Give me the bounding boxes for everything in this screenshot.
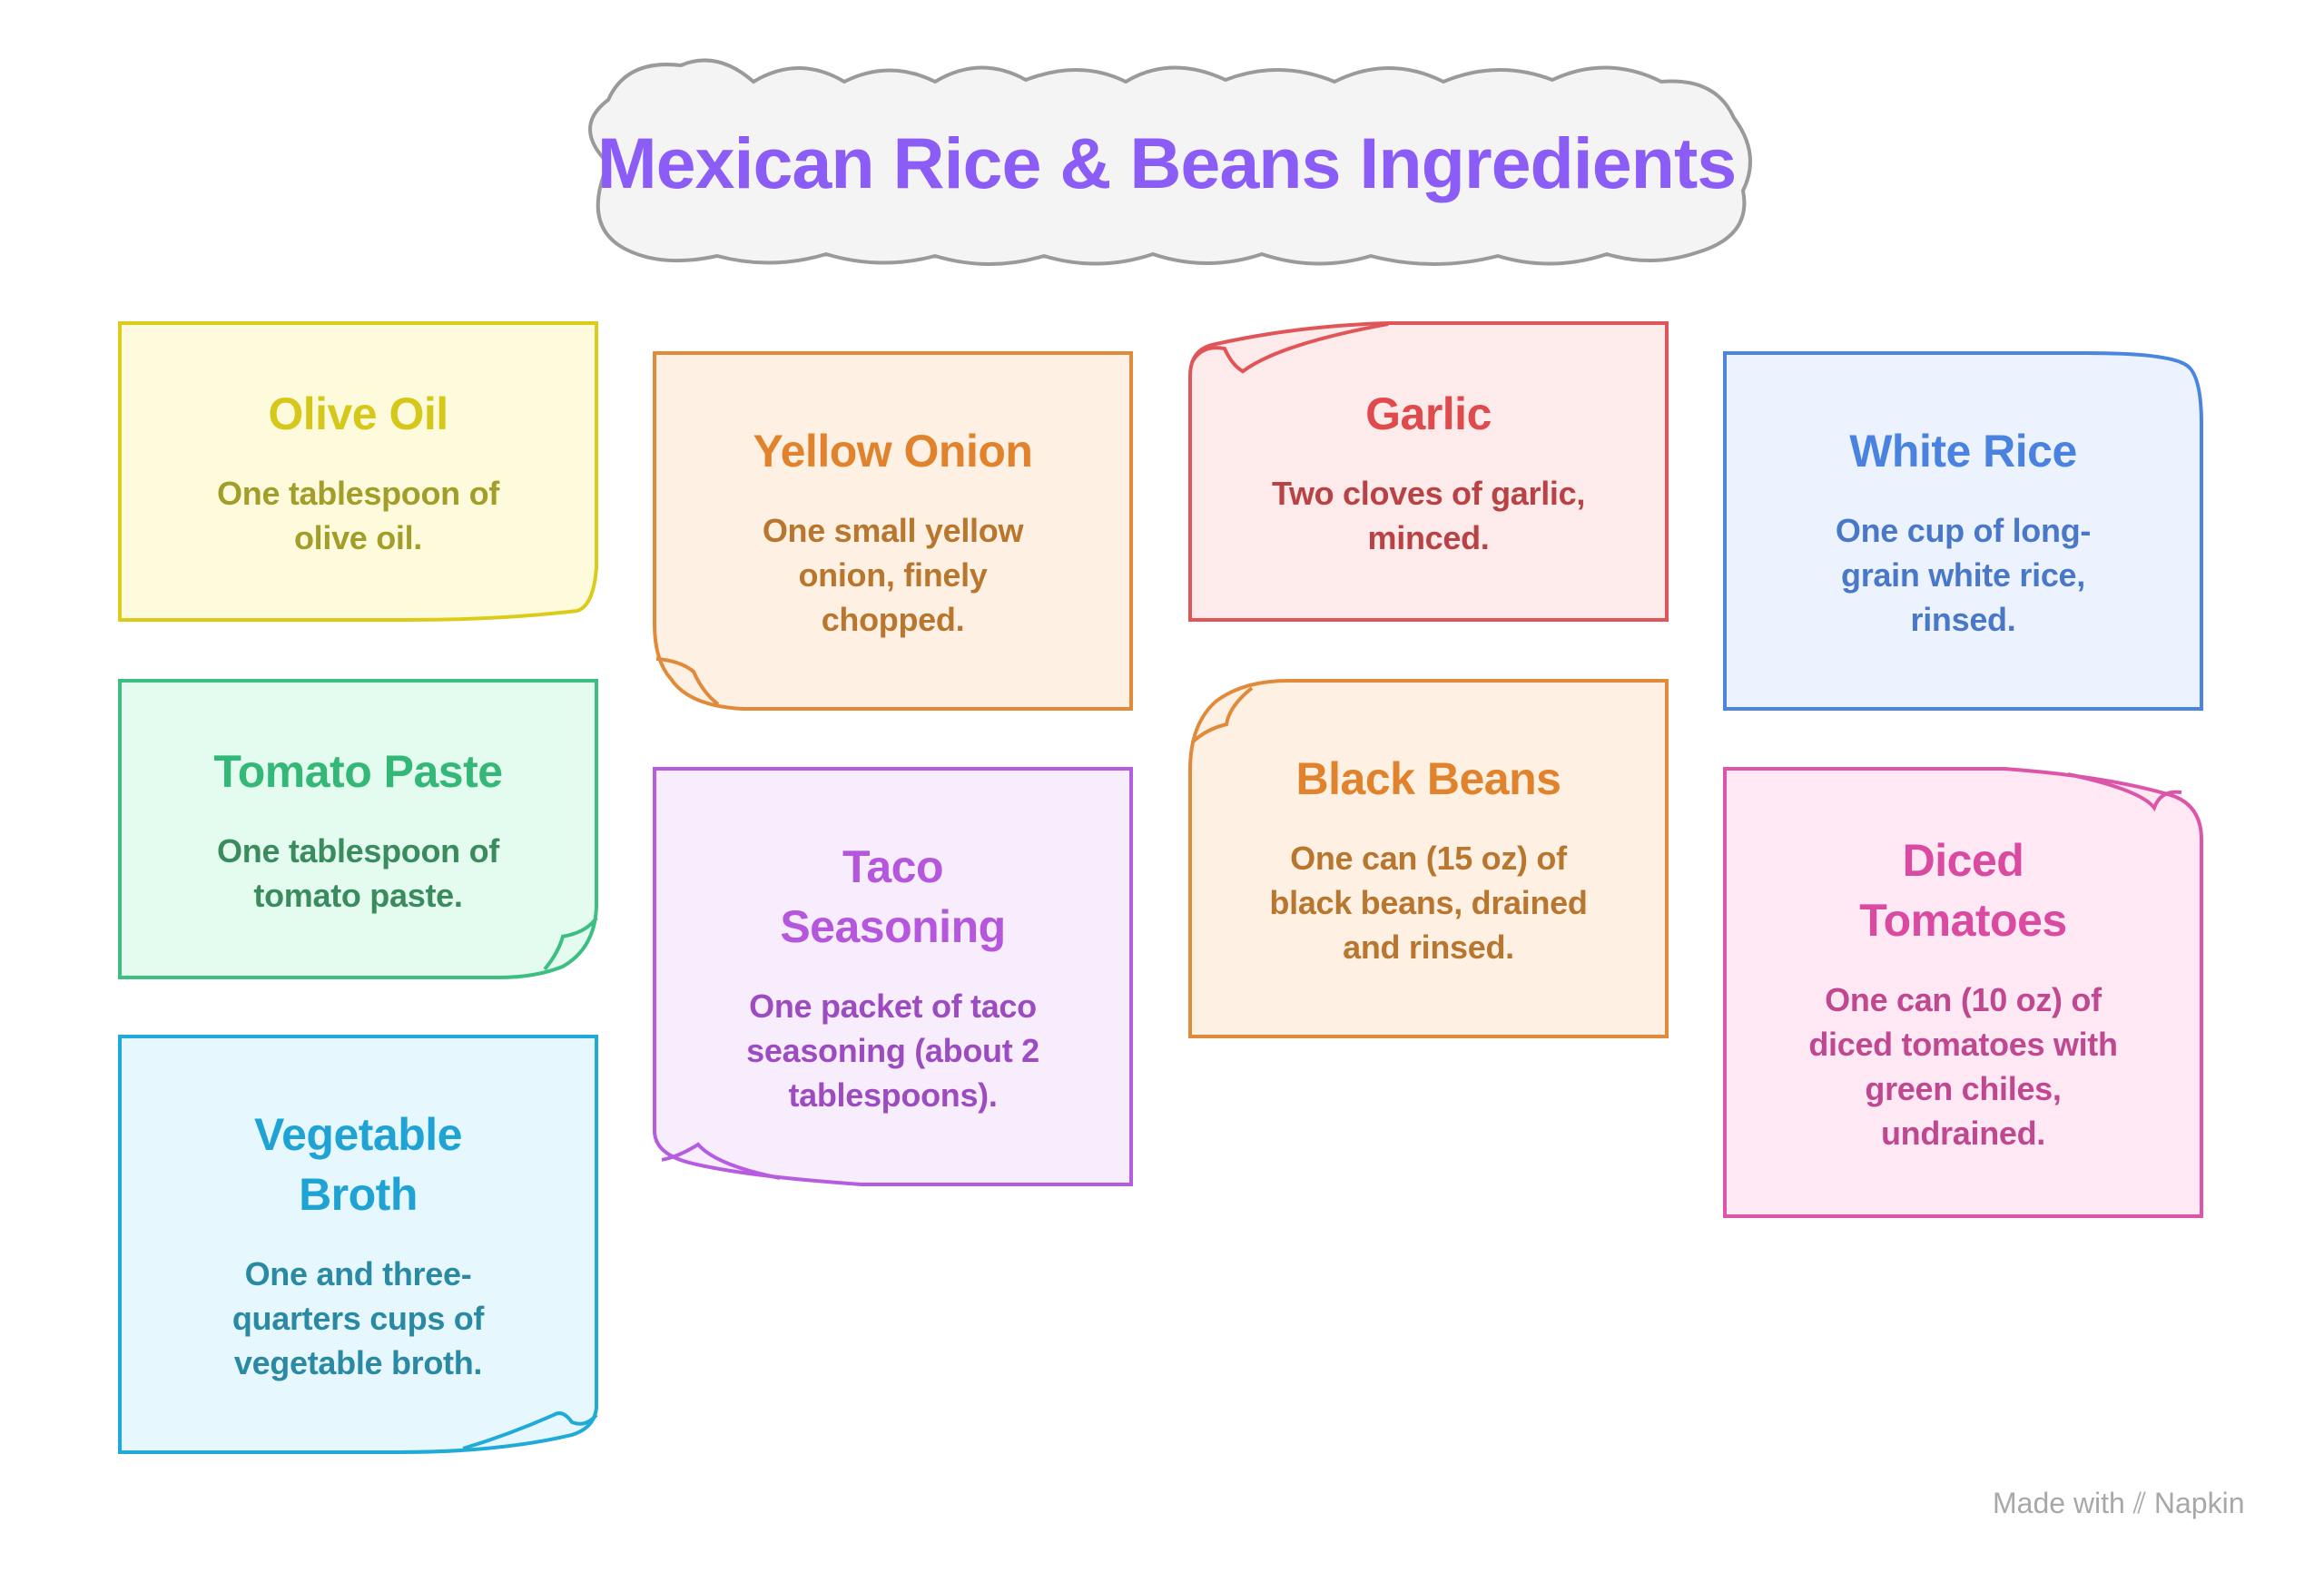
card: olive oil: One tablespoon of xyxy=(217,474,499,512)
card: olive oil: olive oil. xyxy=(294,519,422,555)
card: white rice: One cup of long- xyxy=(1836,512,2091,548)
card: black beans: black beans, drained xyxy=(1269,884,1588,920)
card: taco seasoning: seasoning (about 2 xyxy=(746,1031,1039,1069)
card: white rice xyxy=(1723,351,2203,711)
card: diced tomatoes: Tomatoes xyxy=(1859,895,2067,946)
card: yellow onion: chopped. xyxy=(822,601,964,637)
watermark: Made with ⫽ Napkin xyxy=(1993,1487,2245,1519)
card: tomato paste xyxy=(118,679,598,979)
card: tomato paste: tomato paste. xyxy=(253,877,463,913)
card: tomato paste: Tomato Paste xyxy=(213,746,503,797)
card: garlic: minced. xyxy=(1368,519,1489,555)
card: white rice: White Rice xyxy=(1849,425,2077,476)
card: olive oil xyxy=(118,321,598,622)
card: yellow onion: Yellow Onion xyxy=(753,425,1032,476)
card: taco seasoning: tablespoons). xyxy=(788,1076,998,1113)
card: diced tomatoes xyxy=(1723,767,2203,1218)
card: yellow onion: onion, finely xyxy=(798,555,988,594)
card: vegetable broth: Vegetable xyxy=(254,1109,462,1160)
card: diced tomatoes: green chiles, xyxy=(1865,1069,2062,1107)
card: diced tomatoes: diced tomatoes with xyxy=(1808,1026,2118,1062)
card: black beans: One can (15 oz) of xyxy=(1290,839,1567,877)
card: taco seasoning: One packet of taco xyxy=(749,987,1037,1024)
card: black beans: and rinsed. xyxy=(1343,928,1514,966)
title: Mexican Rice & Beans Ingredients xyxy=(597,123,1736,203)
card: white rice: grain white rice, xyxy=(1841,555,2085,594)
card: vegetable broth: One and three- xyxy=(245,1254,471,1292)
card: garlic xyxy=(1188,321,1669,622)
card: vegetable broth: quarters cups of xyxy=(232,1300,484,1336)
card: vegetable broth: Broth xyxy=(299,1169,418,1220)
card: yellow onion xyxy=(653,351,1133,711)
card: diced tomatoes: undrained. xyxy=(1881,1115,2045,1151)
card: vegetable broth xyxy=(118,1035,598,1454)
card: white rice: rinsed. xyxy=(1911,601,2015,637)
card: black beans: Black Beans xyxy=(1296,753,1561,804)
card: taco seasoning xyxy=(653,767,1133,1186)
title cloud xyxy=(588,58,1752,266)
card: diced tomatoes: One can (10 oz) of xyxy=(1825,980,2102,1018)
card: yellow onion: One small yellow xyxy=(763,512,1023,548)
card: taco seasoning: Taco xyxy=(842,840,943,891)
card: garlic: Garlic xyxy=(1365,388,1492,439)
card: vegetable broth: vegetable broth. xyxy=(234,1343,482,1381)
card: tomato paste: One tablespoon of xyxy=(217,831,499,870)
card: diced tomatoes: Diced xyxy=(1903,835,2024,886)
card: taco seasoning: Seasoning xyxy=(780,900,1006,951)
card: olive oil: Olive Oil xyxy=(268,388,448,439)
card: black beans xyxy=(1188,679,1669,1038)
card: garlic: Two cloves of garlic, xyxy=(1272,474,1585,512)
